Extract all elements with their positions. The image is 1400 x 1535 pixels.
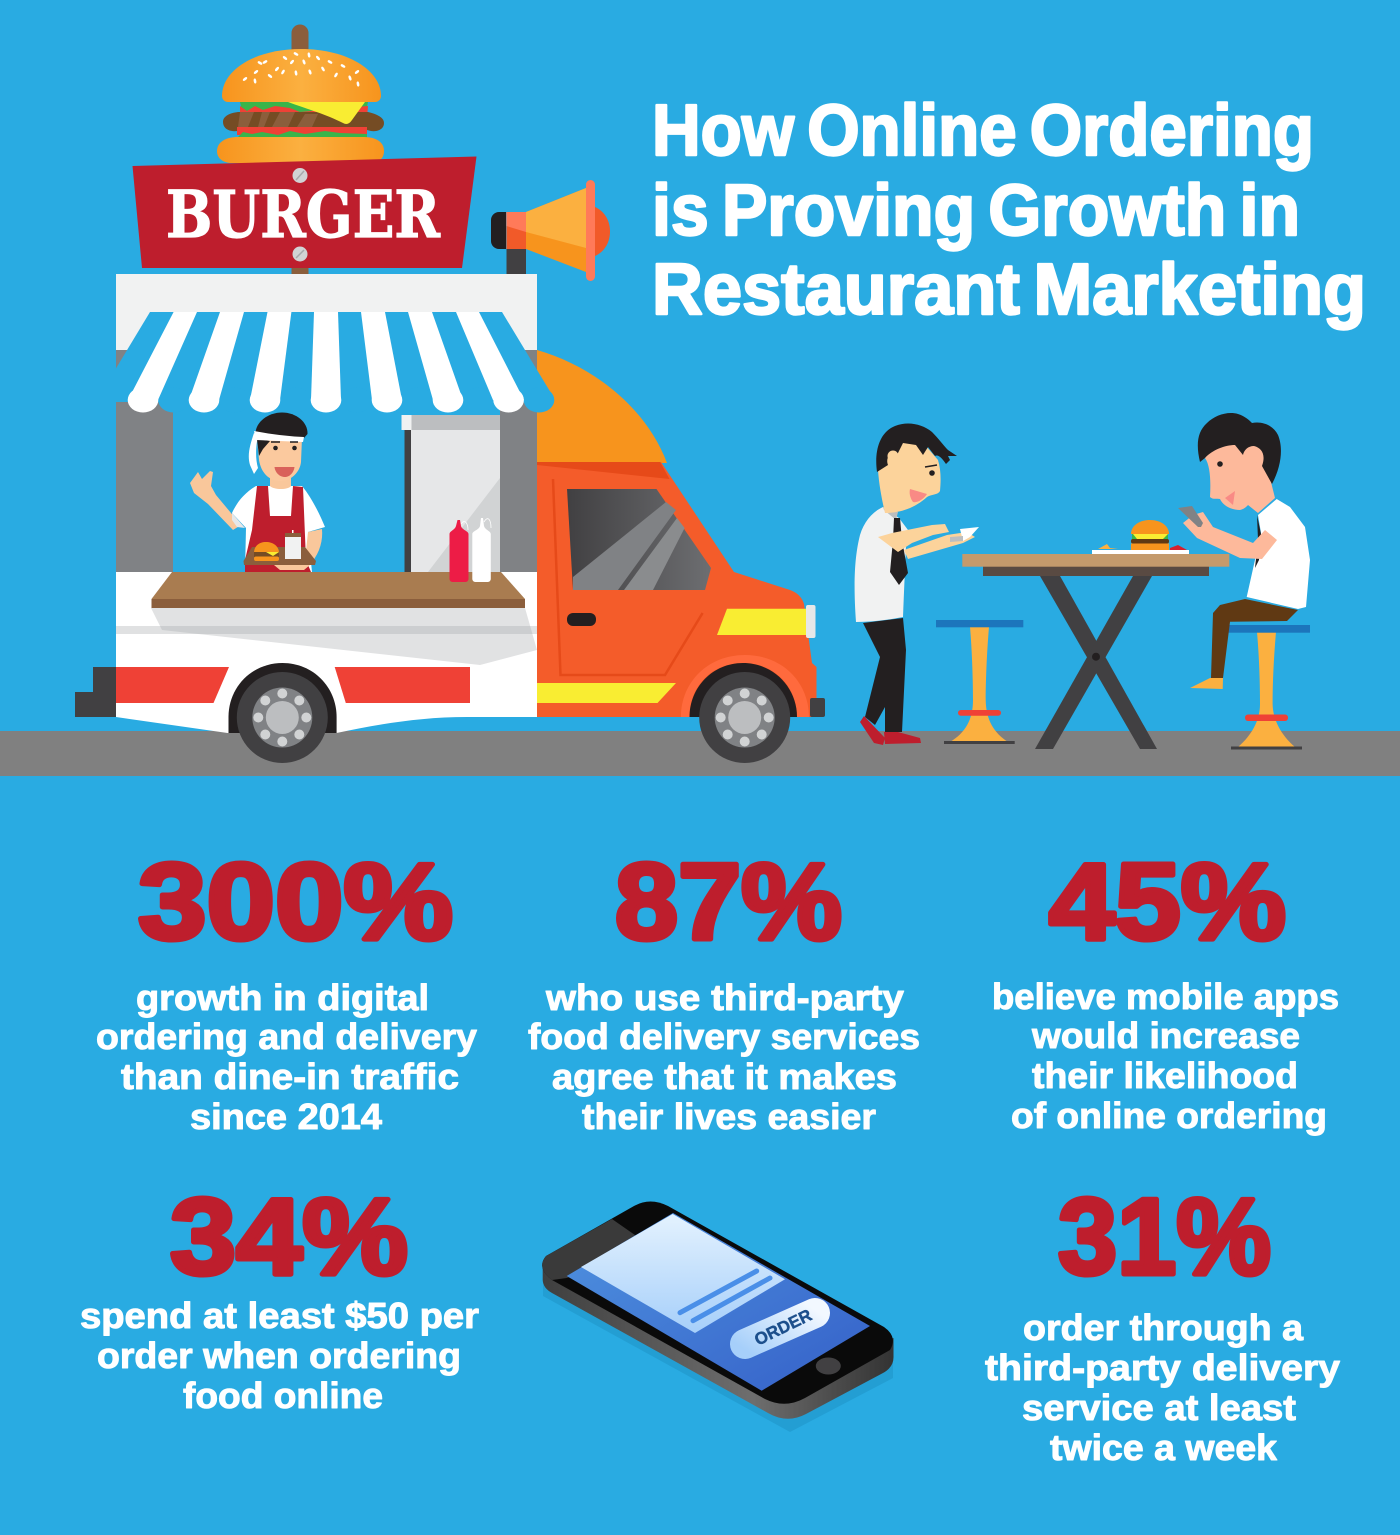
stool right [1227,625,1310,750]
truck cab [537,462,825,717]
stat: 300%: 300% [138,841,453,963]
character: chef [190,412,325,572]
truck upper panel [116,274,537,354]
serving counter [152,572,525,608]
lower truck body [116,572,537,733]
table [962,520,1229,749]
stat: 45%: 45% [1049,841,1286,963]
stat: 300%: growth in digital [136,977,429,1018]
cab window [567,489,711,590]
illustration: food truck [75,25,825,763]
counter shadow [151,608,537,665]
stat: 45% [992,841,1339,1136]
red body stripes [116,667,470,703]
body trim strip [116,626,537,634]
sign pole [292,25,308,274]
burger sign board [132,156,476,268]
illustration: seated customer with phone [1178,413,1310,750]
order button: ORDER [751,1305,815,1349]
orange cab roof [537,350,667,463]
icon: megaphone [491,180,610,281]
title [652,91,1366,330]
stat: 87% [528,841,920,1137]
stat: 34%: order when ordering [97,1335,461,1376]
sign text: BURGER [166,177,441,253]
title: is Proving Growth in [652,171,1300,251]
stool left [936,620,1023,744]
title: Restaurant Marketing [652,250,1366,330]
rear wheel [228,663,337,763]
stat: 45%: of online ordering [1011,1095,1327,1136]
stat: 34%: food online [183,1375,383,1416]
tray with burger and cup [244,530,316,570]
stat: 31% [985,1176,1340,1468]
icon: smartphone with order button [542,1202,894,1432]
illustration: standing customer with phone [855,424,1023,745]
condiment bottles [450,518,491,582]
stat: 87%: who use third-party [545,977,904,1018]
stat: 31%: order through a [1023,1307,1304,1348]
stat: 31%: service at least [1022,1387,1296,1428]
stat: 300%: than dine-in traffic [121,1056,459,1097]
stat: 300% [96,841,477,1137]
front wheel [681,655,809,763]
stat: 34%: spend at least $50 per [80,1295,479,1336]
food on table [1092,520,1189,554]
stat: 300%: ordering and delivery [96,1016,477,1057]
title: How Online Ordering [652,91,1314,171]
stat: 300%: since 2014 [190,1096,382,1137]
icon: burger on sign [217,49,384,163]
stat: 31%: 31% [1058,1176,1271,1298]
stat: 87%: 87% [615,841,842,963]
fridge [402,415,500,572]
stat: 31%: twice a week [1050,1427,1278,1468]
stat: 45%: would increase [1031,1015,1300,1056]
awning white stripes [128,312,524,412]
awning [115,312,554,412]
stat: 45%: believe mobile apps [992,976,1339,1017]
grey window pillars [116,350,537,572]
stat: 45%: their likelihood [1032,1055,1298,1096]
serving window opening [173,410,500,572]
stat: 87%: their lives easier [582,1096,876,1137]
stat: 34% [80,1176,479,1416]
stat: 87%: food delivery services [528,1016,920,1057]
road [0,731,1400,776]
rear steps [75,667,116,717]
stat: 87%: agree that it makes [552,1056,897,1097]
stat: 34%: 34% [170,1176,408,1298]
stat: 31%: third-party delivery [985,1347,1340,1388]
